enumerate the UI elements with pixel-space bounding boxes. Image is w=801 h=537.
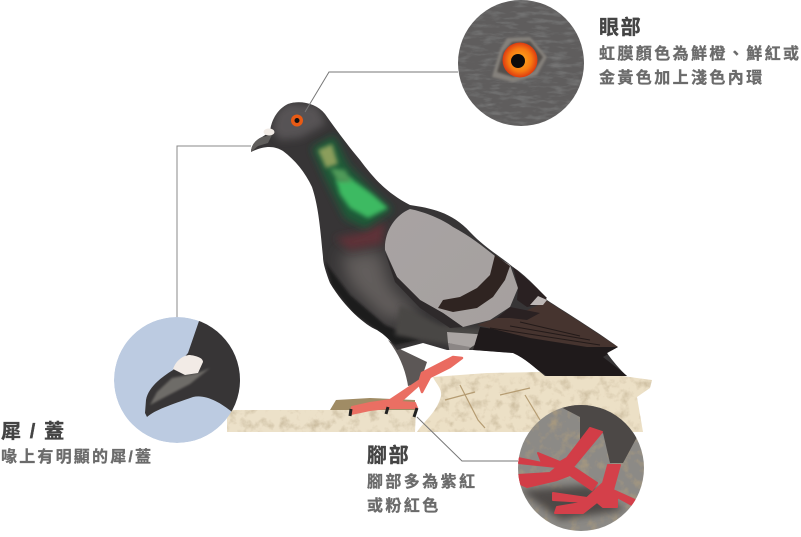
feet inset: thighs: [562, 405, 636, 463]
feet inset: toes front: [518, 428, 602, 490]
label: cere: 喙上有明顯的犀/蓋: [1, 447, 153, 466]
rock ledge: [227, 372, 652, 432]
pigeon: beak and cere: [251, 135, 272, 152]
label: eye: 虹膜顏色為鮮橙、鮮紅或: [599, 44, 801, 63]
pigeon: [240, 95, 640, 417]
pigeon: tail dark: [473, 327, 630, 378]
leader line: beak: [177, 146, 251, 318]
pigeon: body silhouette: [251, 102, 627, 376]
pigeon: neck sheen: [335, 222, 385, 250]
pigeon: head: [272, 103, 326, 140]
label: feet: 腳部多為紫紅: [367, 472, 477, 491]
label: eye: 眼部: [599, 16, 642, 39]
label: cere: 犀 / 蓋: [1, 420, 66, 443]
pigeon: wing bar 1: [438, 255, 510, 312]
label: feet: 腳部: [367, 444, 410, 467]
pigeon: body shading: [340, 250, 420, 320]
inset: feet close-up: [518, 404, 644, 531]
pigeon: legs: [350, 340, 462, 417]
inset: eye close-up: [458, 0, 584, 126]
pigeon: tail brown: [477, 301, 618, 347]
pigeon: wing: [385, 209, 547, 328]
label: feet: 或粉紅色: [367, 496, 441, 515]
pigeon: eye: [291, 114, 303, 126]
pigeon: wing bar 2: [513, 267, 547, 307]
label: eye: 金黃色加上淺色內環: [599, 68, 765, 87]
label: cere: [1, 420, 153, 466]
leader line: feet: [417, 417, 518, 461]
feet inset: toes rear: [553, 465, 635, 513]
label: eye: [599, 16, 801, 87]
label: feet: [367, 444, 477, 515]
inset: beak close-up: [114, 317, 245, 443]
leader line: eye: [305, 72, 458, 112]
